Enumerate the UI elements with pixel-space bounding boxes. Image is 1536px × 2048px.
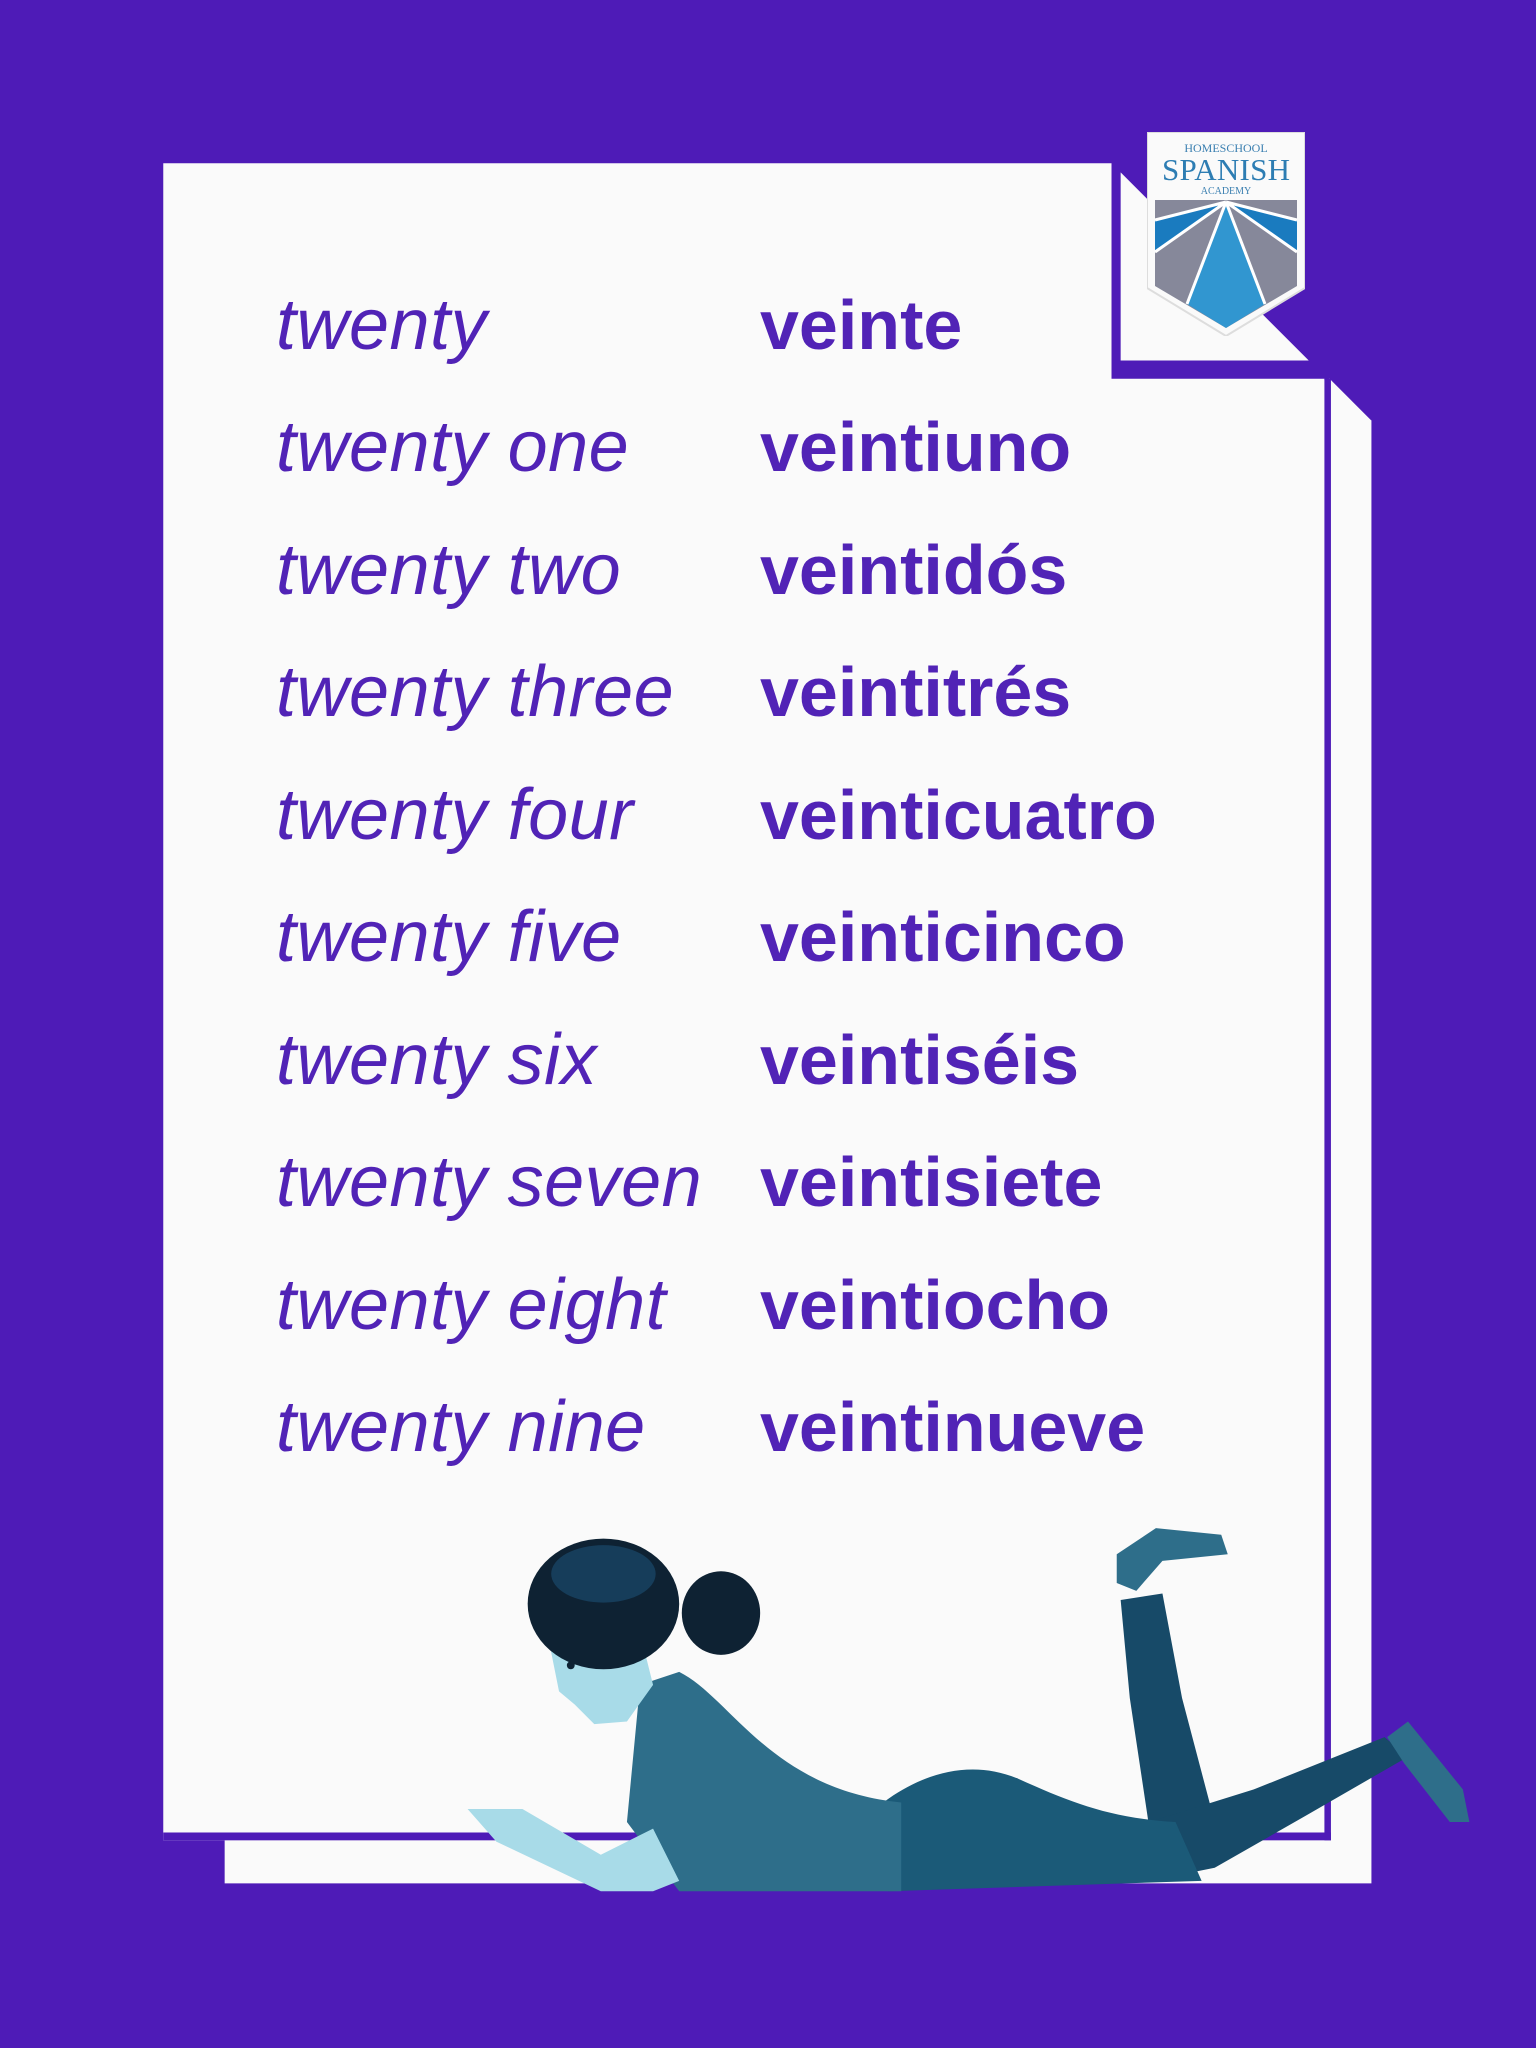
row 25 [276, 897, 1126, 977]
logo: ACADEMY [1201, 186, 1251, 197]
row 28: twenty eight [276, 1265, 666, 1345]
row 29: twenty nine [276, 1387, 646, 1467]
row 22: veintidós [760, 531, 1067, 609]
back page [225, 379, 1371, 1883]
pants/hips [875, 1769, 1202, 1891]
row 27: twenty seven [276, 1142, 702, 1222]
row 26: veintiséis [760, 1021, 1079, 1099]
row 28: veintiocho [760, 1266, 1110, 1344]
shirt/torso [627, 1672, 901, 1891]
vocabulary list [276, 285, 1157, 1467]
row 27: veintisiete [760, 1143, 1102, 1221]
row 22: twenty two [276, 530, 621, 610]
logo [1147, 132, 1305, 336]
row 21: veintiuno [760, 408, 1071, 486]
folded corner [1121, 172, 1309, 360]
row 23 [276, 652, 1071, 732]
row 22 [276, 530, 1067, 610]
hair [528, 1539, 679, 1669]
row 25: twenty five [276, 897, 622, 977]
row 26 [276, 1020, 1079, 1100]
row 24 [276, 775, 1157, 855]
raised leg [1121, 1593, 1215, 1829]
row 20 [276, 285, 962, 365]
row 29: veintinueve [760, 1388, 1145, 1466]
row 24: veinticuatro [760, 776, 1157, 854]
row 23: twenty three [276, 652, 674, 732]
extended leg [1149, 1737, 1408, 1881]
row 20: twenty [276, 285, 487, 365]
front page [163, 163, 1324, 1840]
row 26: twenty six [276, 1020, 597, 1100]
row 21: twenty one [276, 407, 629, 487]
row 29 [276, 1387, 1145, 1467]
row 24: twenty four [276, 775, 634, 855]
logo: SPANISH [1162, 152, 1290, 187]
row 28 [276, 1265, 1110, 1345]
row 21 [276, 407, 1071, 487]
logo: HOMESCHOOL [1184, 141, 1268, 155]
row 25: veinticinco [760, 898, 1126, 976]
row 23: veintitrés [760, 653, 1071, 731]
arms [468, 1809, 679, 1891]
row 20: veinte [760, 286, 962, 364]
row 27 [276, 1142, 1102, 1222]
face [549, 1633, 653, 1724]
